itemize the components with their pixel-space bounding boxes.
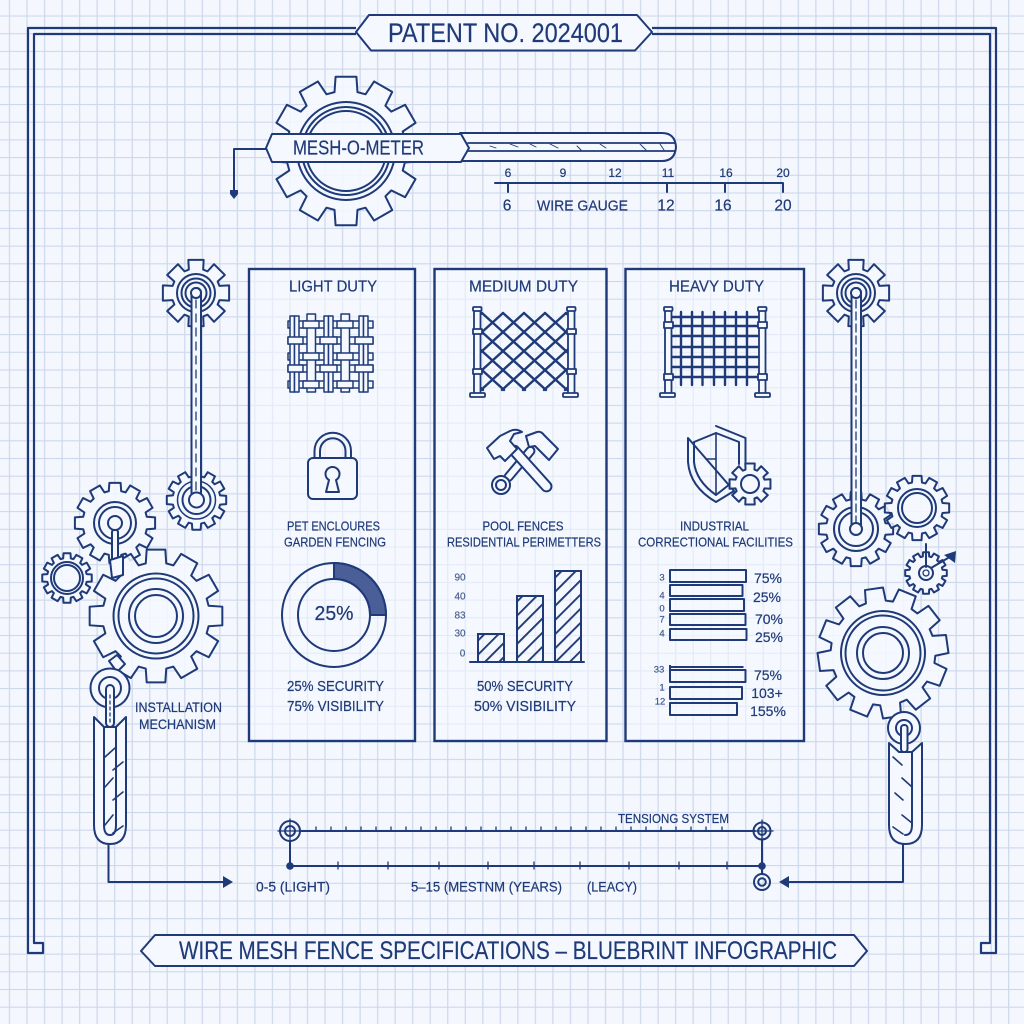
icon: medium gear with crank <box>75 483 155 563</box>
bar chart: 40 <box>454 592 466 602</box>
wire gauge scale: 6 <box>503 198 511 214</box>
patent number banner: PATENT NO. 2024001 <box>388 18 623 48</box>
arrow to timeline <box>108 844 233 888</box>
timeline labels: (LEACY) <box>587 880 637 894</box>
horizontal bar group two: 33 <box>654 664 664 676</box>
icon: large gauge gear <box>272 77 420 225</box>
tensioning system scale: TENSIONG SYSTEM <box>618 812 729 826</box>
icon: padlock <box>308 433 357 499</box>
security and visibility stats <box>287 679 384 715</box>
icon: left pulley <box>278 819 302 843</box>
use cases text <box>638 518 793 550</box>
use cases text: GARDEN FENCING <box>284 534 386 550</box>
horizontal bar group one: 0 <box>659 604 665 614</box>
security and visibility stats: 75% VISIBILITY <box>287 699 384 715</box>
panel: medium duty <box>433 268 608 742</box>
bar chart: 0 <box>460 648 466 660</box>
icon: right pulley <box>751 820 773 842</box>
installation mechanism label: INSTALLATION <box>135 699 222 715</box>
arrow to timeline <box>779 844 903 888</box>
icon: large gear <box>810 580 956 726</box>
wire gauge scale: 11 <box>662 166 675 180</box>
use cases text <box>284 518 386 550</box>
tensioning system scale <box>278 812 773 843</box>
use cases text: INDUSTRIAL <box>680 518 749 534</box>
bar chart: 90 <box>454 572 466 584</box>
horizontal bar group two: 12 <box>655 696 665 708</box>
right gear cluster: tensioning gears <box>779 476 956 888</box>
icon: small gear <box>42 553 92 603</box>
gauge label banner: MESH-O-METER <box>293 138 424 160</box>
installation mechanism label <box>135 699 222 732</box>
title banner: WIRE MESH FENCE SPECIFICATIONS – BLUEBRINT INFOGRAPHIC <box>179 937 837 965</box>
bar chart <box>454 571 584 662</box>
wire gauge scale: 6 <box>505 166 512 180</box>
use cases text: RESIDENTIAL PERIMETTERS <box>447 534 601 550</box>
wire gauge scale: 9 <box>560 166 567 180</box>
wire gauge scale: 12 <box>657 198 675 214</box>
wire gauge scale: 20 <box>774 198 792 214</box>
horizontal bar group one: 7 <box>659 614 665 626</box>
icon: upper right gear <box>823 260 889 326</box>
right link: upper and lower gears <box>819 260 893 566</box>
icon: lower left gear <box>167 470 226 530</box>
use cases text: POOL FENCES <box>482 518 564 534</box>
icon: upper left gear <box>163 260 229 326</box>
horizontal bar group two: 103+ <box>751 685 783 701</box>
icon: crossed hammers with wrench <box>487 430 558 494</box>
donut chart 25%: 25% <box>314 603 354 625</box>
wire gauge scale: WIRE GAUGE <box>537 198 628 214</box>
pivot lug <box>109 655 125 672</box>
mesh-o-meter gauge <box>230 77 676 225</box>
icon: welded grid fence <box>660 307 770 397</box>
horizontal bar group one: 4 <box>659 628 665 640</box>
bar chart: 30 <box>454 628 466 640</box>
horizontal bar group two <box>654 664 786 719</box>
wire gauge scale: 16 <box>714 198 732 214</box>
icon: lower right gear <box>819 492 893 566</box>
horizontal bar group one <box>659 570 783 645</box>
wire gauge scale <box>495 166 792 214</box>
wire gauge scale: 20 <box>776 166 790 180</box>
security and visibility stats <box>474 679 576 715</box>
security and visibility stats: 25% SECURITY <box>287 679 384 695</box>
icon: shield with gear <box>688 426 770 504</box>
icon: plain gear <box>885 476 949 540</box>
leader with marker <box>230 149 266 199</box>
gauge tube <box>460 133 676 161</box>
icon: woven mesh <box>288 314 373 392</box>
horizontal bar group one: 75% <box>754 570 782 586</box>
left link: upper and lower gears <box>163 260 229 530</box>
horizontal bar group one: 70% <box>755 611 783 627</box>
lifespan timeline <box>256 840 770 894</box>
icon: pivot hub and tube <box>888 712 922 844</box>
icon: timeline end marker <box>754 874 770 890</box>
horizontal bar group two: 155% <box>750 703 786 719</box>
security and visibility stats: 50% VISIBILITY <box>474 699 576 715</box>
horizontal bar group one: 3 <box>659 572 665 584</box>
connecting rod <box>189 288 204 508</box>
icon: small gear with arrow <box>905 544 956 594</box>
connecting rod <box>850 288 862 535</box>
timeline labels: 0-5 (LIGHT) <box>256 880 330 894</box>
use cases text: PET ENCLOURES <box>287 518 380 534</box>
panel: heavy duty <box>626 269 804 741</box>
bar chart: 83 <box>454 610 466 622</box>
icon: chain link fence <box>469 306 579 398</box>
icon: large gear <box>90 550 222 682</box>
horizontal bar group two: 75% <box>754 667 782 683</box>
donut chart 25% <box>282 563 386 667</box>
crank lug <box>110 556 123 578</box>
use cases text <box>447 518 601 550</box>
horizontal bar group one: 25% <box>753 589 781 605</box>
panel: light duty <box>249 269 415 741</box>
icon: pivot hub and tube <box>90 668 130 844</box>
wire gauge scale: 16 <box>719 166 733 180</box>
horizontal bar group one: 25% <box>755 629 783 645</box>
left gear cluster: installation mechanism <box>42 483 233 888</box>
security and visibility stats: 50% SECURITY <box>477 679 573 695</box>
wire gauge scale: 12 <box>608 166 622 180</box>
heading: heavy duty: HEAVY DUTY <box>669 278 764 296</box>
heading: light duty: LIGHT DUTY <box>289 278 377 296</box>
installation mechanism label: MECHANISM <box>139 716 216 732</box>
timeline labels: 5–15 (MESTNM (YEARS) <box>411 880 562 894</box>
use cases text: CORRECTIONAL FACILITIES <box>638 534 793 550</box>
gauge label banner <box>266 134 469 162</box>
timeline labels <box>256 880 637 894</box>
horizontal bar group one: 4 <box>659 590 665 602</box>
heading: medium duty: MEDIUM DUTY <box>469 278 578 296</box>
horizontal bar group two: 1 <box>659 682 665 694</box>
